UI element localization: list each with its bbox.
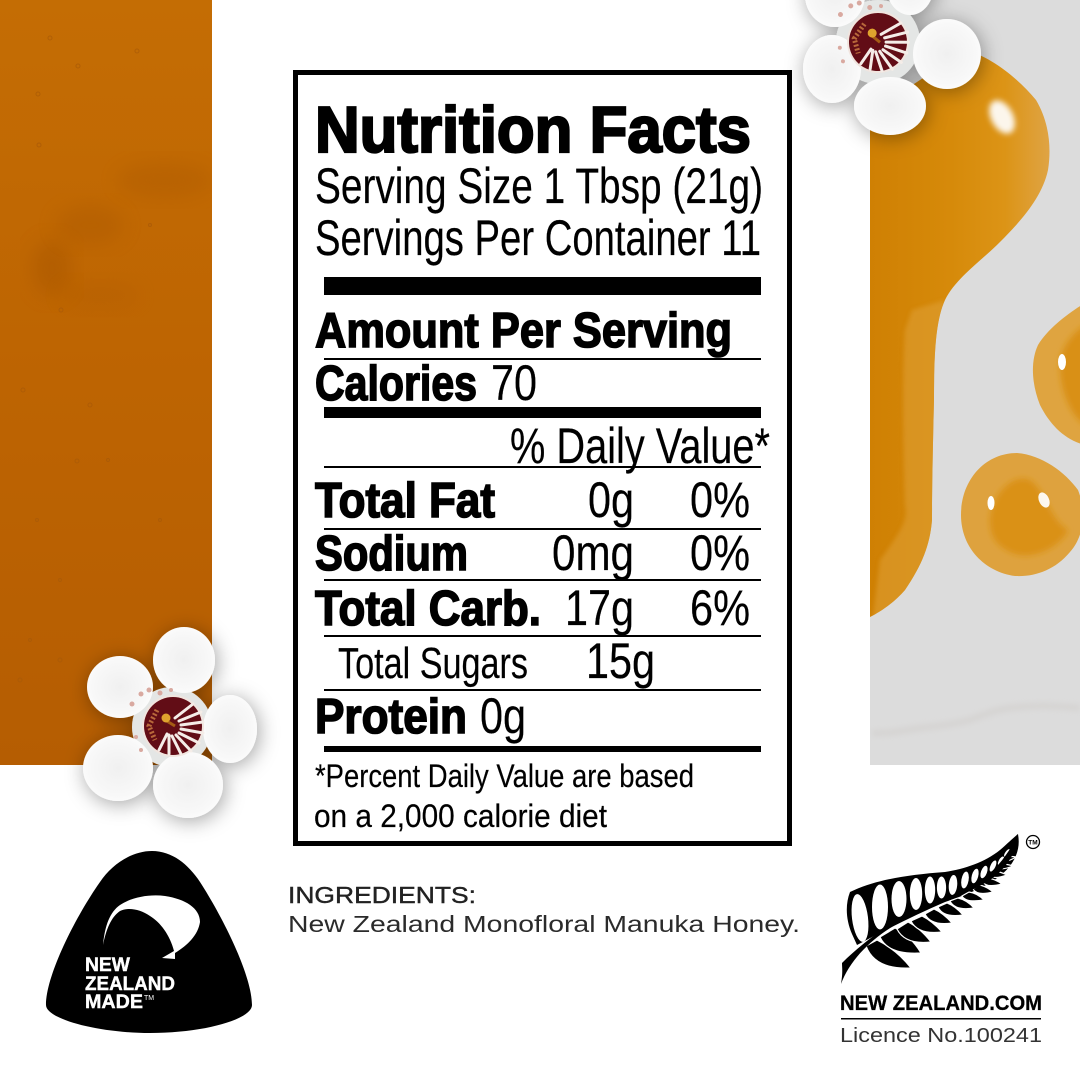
- panel: right honey photo: [860, 0, 1080, 765]
- rule: [841, 1018, 1041, 1020]
- divider: [324, 466, 761, 468]
- logo: New Zealand Made: MADE: [85, 992, 143, 1013]
- licence number: Licence No.100241: [840, 1024, 1042, 1047]
- thick divider: [324, 277, 761, 295]
- divider: [324, 635, 761, 637]
- honey drop right: [1033, 303, 1080, 445]
- row: total fat: Total Fat: [315, 474, 495, 528]
- row: sodium: Sodium: [315, 527, 468, 581]
- heading: Nutrition Facts: Nutrition Facts: [315, 93, 751, 166]
- divider: [324, 358, 761, 360]
- row: sodium: 0mg: [552, 525, 634, 581]
- icon: manuka flower top right: [803, 0, 981, 135]
- honey highlight: [984, 96, 1020, 138]
- honey pour: [860, 50, 1050, 620]
- ingredients text block: [288, 882, 800, 937]
- honey inner lighter edge: [872, 300, 944, 616]
- icon: manuka flower bottom left: [83, 627, 257, 818]
- row: total fat: 0%: [690, 472, 750, 528]
- ingredients text block: New Zealand Monofloral Manuka Honey.: [288, 911, 800, 937]
- row: total fat: [315, 472, 750, 528]
- medium divider: [324, 407, 761, 418]
- logo: New Zealand Made: [46, 851, 252, 1033]
- label border: [296, 72, 790, 844]
- row: total carb: 17g: [565, 580, 634, 636]
- fern white gaps: [849, 848, 1011, 943]
- panel: left honey texture: [0, 0, 213, 765]
- calories row: 70: [491, 355, 537, 411]
- percent daily value header: % Daily Value*: [510, 418, 770, 474]
- row: protein: Protein: [315, 690, 467, 744]
- logo: New Zealand Made: NEW: [85, 955, 130, 976]
- footnote: *Percent Daily Value are based: [315, 758, 694, 794]
- footnote: [314, 758, 694, 834]
- trademark symbol: TM: [1028, 840, 1038, 846]
- serving size: Serving Size 1 Tbsp (21g): [315, 158, 763, 214]
- row: total fat: 0g: [588, 472, 634, 528]
- thick divider: [324, 746, 761, 752]
- logo: New Zealand Made: ZEALAND: [85, 974, 175, 995]
- row: total carb: [315, 580, 750, 636]
- trademark symbol: [1026, 836, 1040, 848]
- divider: [324, 689, 761, 691]
- divider: [324, 528, 761, 530]
- row: sodium: 0%: [690, 525, 750, 581]
- row: sodium: [315, 525, 750, 581]
- panel: white centre column over honey edge: [212, 0, 870, 765]
- footnote: on a 2,000 calorie diet: [314, 798, 607, 834]
- row: total sugars: Total Sugars: [338, 639, 528, 688]
- row: total carb: Total Carb.: [315, 582, 541, 636]
- ingredients text block: INGREDIENTS:: [288, 882, 476, 908]
- row: total sugars: [338, 633, 655, 689]
- logo: New Zealand Made: TM: [144, 995, 154, 1002]
- servings per container: Servings Per Container 11: [315, 210, 761, 266]
- calories row: Calories: [315, 357, 477, 411]
- logo: silver fern: [840, 834, 1042, 1047]
- amount per serving: Amount Per Serving: [315, 304, 732, 358]
- divider: [324, 579, 761, 581]
- fern upper frond: [847, 834, 1019, 945]
- row: protein: 0g: [480, 688, 526, 744]
- fern lower leaflets: [866, 856, 1016, 968]
- row: total carb: 6%: [690, 580, 750, 636]
- honey drop lower: [961, 453, 1080, 576]
- panel: nutrition facts label: [296, 72, 790, 844]
- fern stem: [841, 834, 1018, 984]
- row: total sugars: 15g: [586, 633, 655, 689]
- fern wordmark: NEW ZEALAND.COM: [840, 992, 1042, 1015]
